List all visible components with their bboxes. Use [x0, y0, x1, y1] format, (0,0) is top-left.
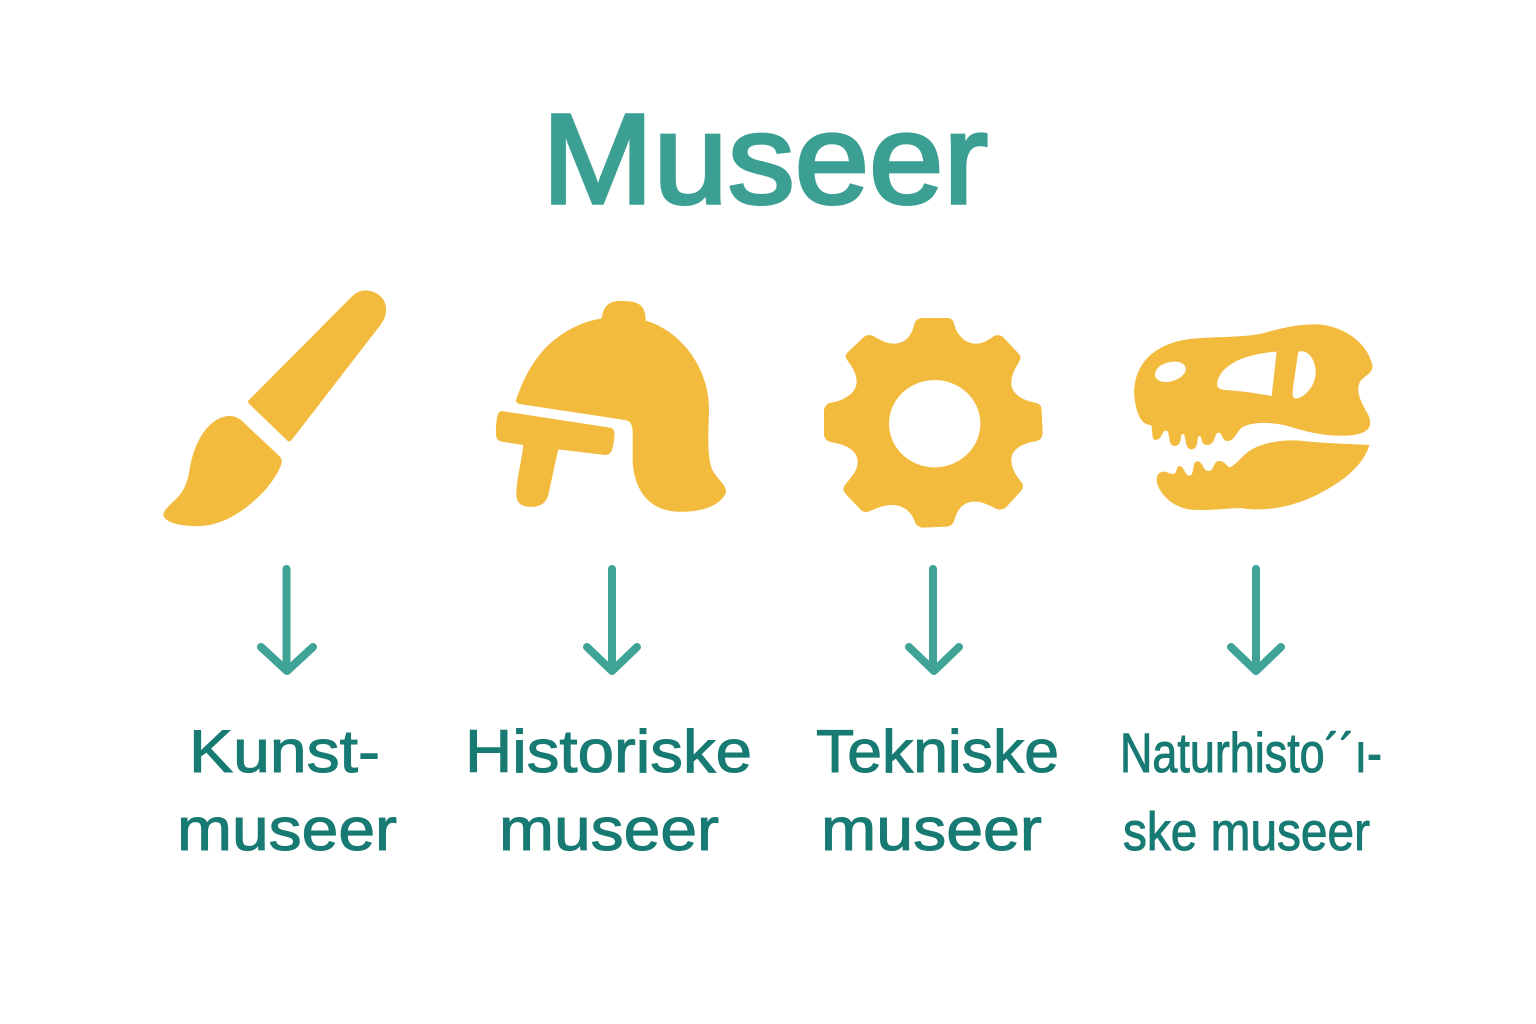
label: naturhistoriske museer: [1120, 721, 1382, 862]
icon: dinosaur skull: [1134, 324, 1372, 510]
label: tekniske museer: [816, 718, 1059, 863]
label: tekniske museer: Tekniske: [816, 718, 1059, 785]
arrow: naturhistoriske museer: [1231, 569, 1281, 671]
label: kunstmuseer: Kunst-: [189, 718, 380, 785]
title: Museer: [542, 88, 988, 231]
label: tekniske museer: museer: [821, 796, 1042, 863]
label: historiske museer: museer: [499, 796, 719, 863]
label: historiske museer: Historiske: [465, 718, 752, 785]
icon: gear: [824, 318, 1043, 528]
label: naturhistoriske museer: Naturhisto´´ı-: [1120, 721, 1382, 784]
label: naturhistoriske museer: ske museer: [1123, 802, 1370, 862]
label: kunstmuseer: museer: [177, 796, 397, 863]
label: historiske museer: [465, 718, 752, 863]
arrow: tekniske museer: [909, 569, 959, 671]
icon: paint brush: [163, 290, 386, 526]
arrow: historiske museer: [587, 569, 637, 671]
label: kunstmuseer: [177, 718, 397, 863]
arrow: kunstmuseer: [261, 569, 313, 671]
icon: helmet: [496, 301, 726, 512]
